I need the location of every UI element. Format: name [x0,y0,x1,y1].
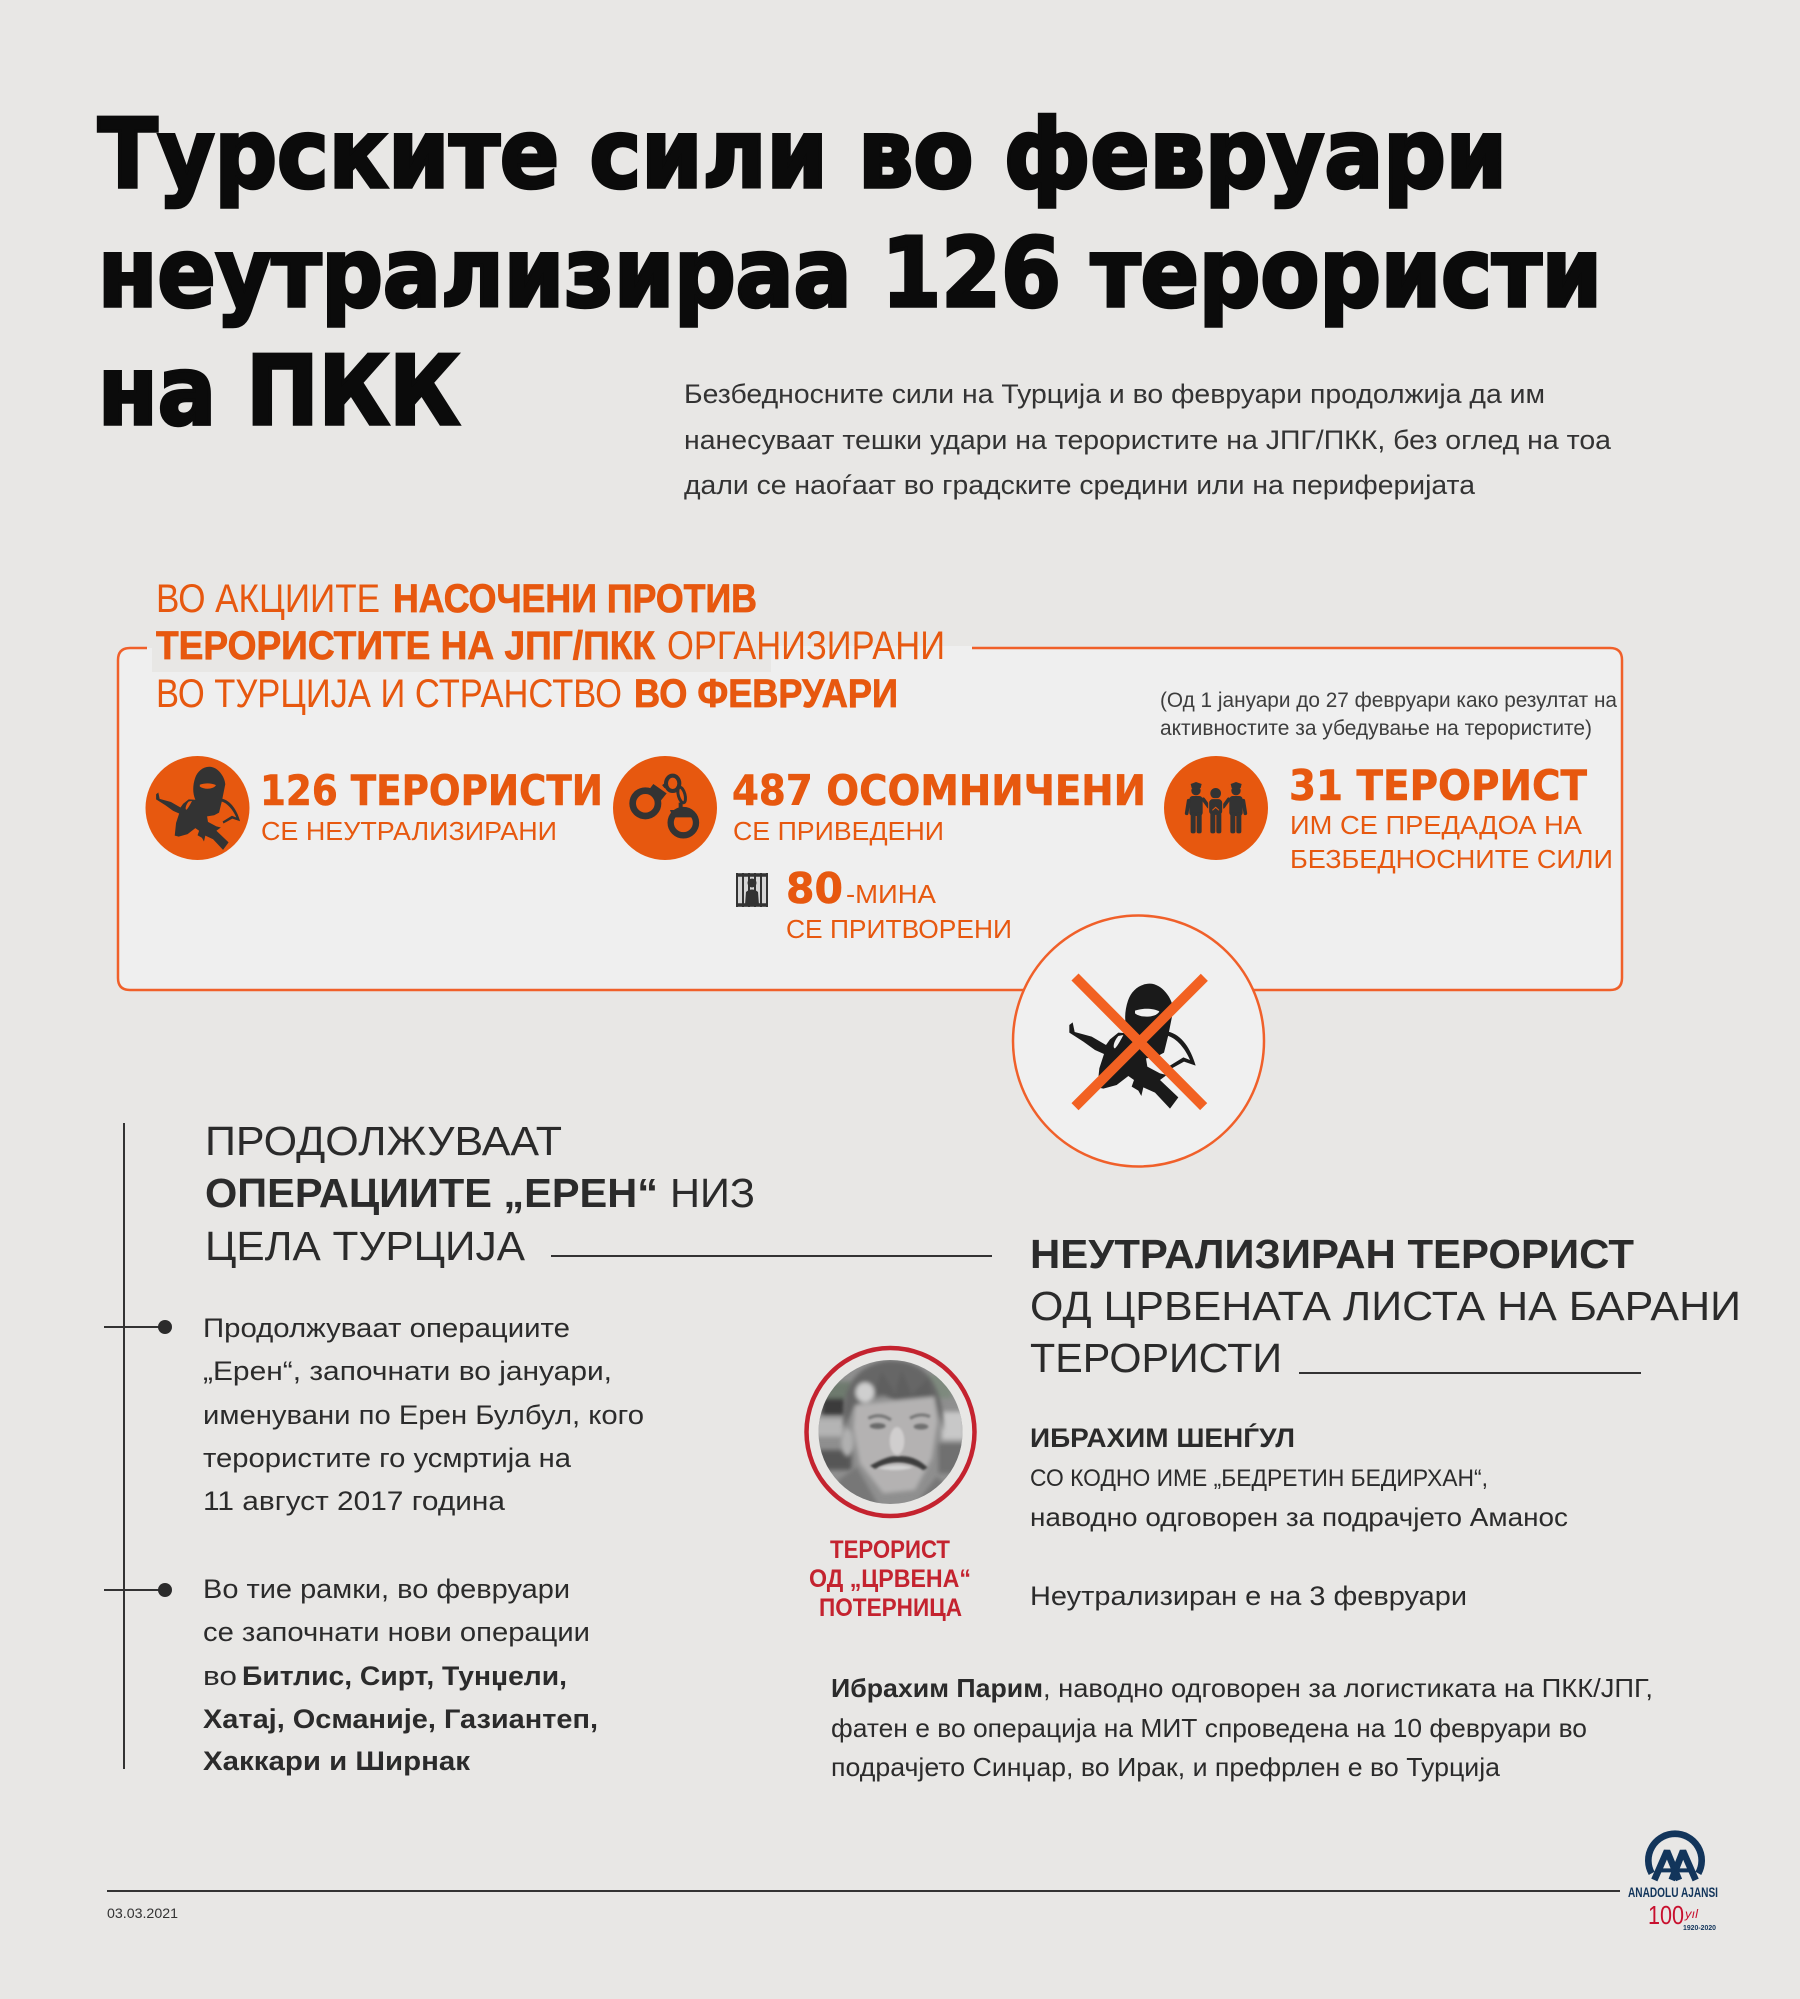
note [1160,689,1617,740]
icon: prison bars [736,873,768,907]
heading: neutralised terrorist: НЕУТРАЛИЗИРАН ТЕРОРИСТ [1030,1231,1634,1277]
stat: 487 suspects: 487 ОСОМНИЧЕНИ [732,766,1146,815]
heading: Eren operations: ПРОДОЛЖУВААТ [205,1118,562,1164]
heading: neutralised terrorist: ОД ЦРВЕНАТА ЛИСТА НА БАРАНИ [1030,1283,1741,1329]
logo: Anadolu Agency: yıl [1684,1907,1698,1921]
panel: operations in February [118,577,1622,990]
stat: 31 surrendered [1289,761,1613,874]
panel heading: ОРГАНИЗИРАНИ [667,624,945,668]
stat: 126 terrorists: 126 ТЕРОРИСТИ [260,766,603,815]
heading: neutralised terrorist [1030,1231,1741,1381]
title: неутрализираа 126 терористи [98,219,1602,329]
logo: Anadolu Agency [1628,1834,1718,1932]
stat: 80 detained: -МИНА [846,879,937,909]
caption: red notice terrorist [809,1536,971,1622]
icon: crossed-out terrorist [1013,916,1264,1166]
text block: Ibrahim Parim: , наводно одговорен за логистиката на ПКК/ЈПГ, [1043,1673,1653,1703]
panel heading: ВО АКЦИИТЕ [156,577,380,621]
icon: handcuffs [613,756,717,860]
title [98,100,1602,447]
stat: 487 suspects [732,766,1146,846]
text block: Ibrahim Shengul: Неутрализиран е на 3 февруари [1030,1581,1467,1611]
portrait photo [806,1348,974,1516]
stat: 31 surrendered: 31 ТЕРОРИСТ [1289,761,1587,810]
stat: 126 terrorists [260,766,603,846]
heading: Eren operations: НИЗ [670,1170,755,1216]
footer: date: 03.03.2021 [107,1905,178,1921]
stat: 126 terrorists: СЕ НЕУТРАЛИЗИРАНИ [261,816,557,846]
text block: new operations [203,1574,598,1776]
text block: new operations: Битлис, Сирт, Тунџели, [242,1661,567,1691]
text block: Ibrahim Shengul: наводно одговорен за подрачјето Аманос [1030,1502,1568,1532]
heading: Eren operations: ОПЕРАЦИИТЕ „ЕРЕН“ [205,1170,658,1216]
panel heading: НАСОЧЕНИ ПРОТИВ [393,577,757,621]
text block: new operations: се започнати нови операции [203,1617,590,1647]
logo: Anadolu Agency: 1920-2020 [1683,1925,1716,1932]
text block: Eren operations [203,1313,644,1516]
panel heading: ТЕРОРИСТИТЕ НА ЈПГ/ПКК [156,624,656,668]
text block: Ibrahim Shengul: ИБРАХИМ ШЕНЃУЛ [1030,1422,1295,1453]
caption: red notice terrorist: ТЕРОРИСТ [830,1536,950,1564]
text block: Ibrahim Parim: Ибрахим Парим [831,1673,1043,1703]
note: (Од 1 јануари до 27 февруари како резултат на [1160,689,1617,712]
stat: 487 suspects: СЕ ПРИВЕДЕНИ [733,816,944,846]
stat: 80 detained: 80 [786,864,843,913]
heading: Eren operations [205,1118,992,1269]
text block: Eren operations: 11 август 2017 година [203,1486,506,1516]
caption: red notice terrorist: ОД „ЦРВЕНА“ [809,1565,971,1593]
panel heading [156,577,945,716]
heading: neutralised terrorist: ТЕРОРИСТИ [1030,1335,1282,1381]
text block: Eren operations: терористите го усмртија на [203,1443,572,1473]
stat: 31 surrendered: БЕЗБЕДНОСНИТЕ СИЛИ [1290,844,1613,874]
caption: red notice terrorist: ПОТЕРНИЦА [819,1594,962,1622]
note: активностите за убедување на терористите) [1160,717,1592,740]
intro text: нанесуваат тешки удари на терористите на ЈПГ/ПКК, без оглед на тоа [684,425,1612,455]
text block: Eren operations: Продолжуваат операциите [203,1313,570,1343]
text block: Ibrahim Shengul: СО КОДНО ИМЕ „БЕДРЕТИН БЕДИРХАН“, [1030,1465,1488,1492]
icon: police and surrendering person [1164,756,1268,860]
stat: 80 detained [786,864,1012,944]
text block: new operations: Хатај, Османије, Газиантеп, [203,1704,598,1734]
text block: Ibrahim Parim: фатен е во операција на МИТ спроведена на 10 февруари во [831,1713,1587,1743]
icon: masked terrorist [146,756,250,860]
timeline [104,1123,172,1769]
text block: Eren operations: именувани по Ерен Булбул, кого [203,1400,644,1430]
stat: 31 surrendered: ИМ СЕ ПРЕДАДОА НА [1290,810,1583,840]
text block: Eren operations: „Ерен“, започнати во јануари, [203,1356,612,1386]
intro text [684,379,1612,500]
panel heading: ВО ТУРЦИЈА И СТРАНСТВО [156,672,622,716]
intro text: дали се наоѓаат во градските средини или на периферијата [684,470,1476,500]
intro text: Безбедносните сили на Турција и во февруари продолжија да им [684,379,1545,409]
title: на ПКК [98,337,460,447]
text block: Ibrahim Parim [831,1673,1653,1782]
logo: Anadolu Agency: ANADOLU AJANSI [1628,1884,1718,1900]
title: Турските сили во февруари [98,100,1507,210]
text block: new operations: Хаккари и Ширнак [203,1746,471,1776]
text block: Ibrahim Shengul [1030,1422,1568,1611]
text block: new operations: Во тие рамки, во февруари [203,1574,570,1604]
panel heading: ВО ФЕВРУАРИ [634,672,898,716]
stat: 80 detained: СЕ ПРИТВОРЕНИ [786,914,1012,944]
heading: Eren operations: ЦЕЛА ТУРЦИЈА [205,1223,526,1269]
logo: Anadolu Agency: 100 [1648,1900,1684,1930]
text block: Ibrahim Parim: подрачјето Синџар, во Ирак, и префрлен е во Турција [831,1752,1501,1782]
text block: new operations: во [203,1661,237,1691]
